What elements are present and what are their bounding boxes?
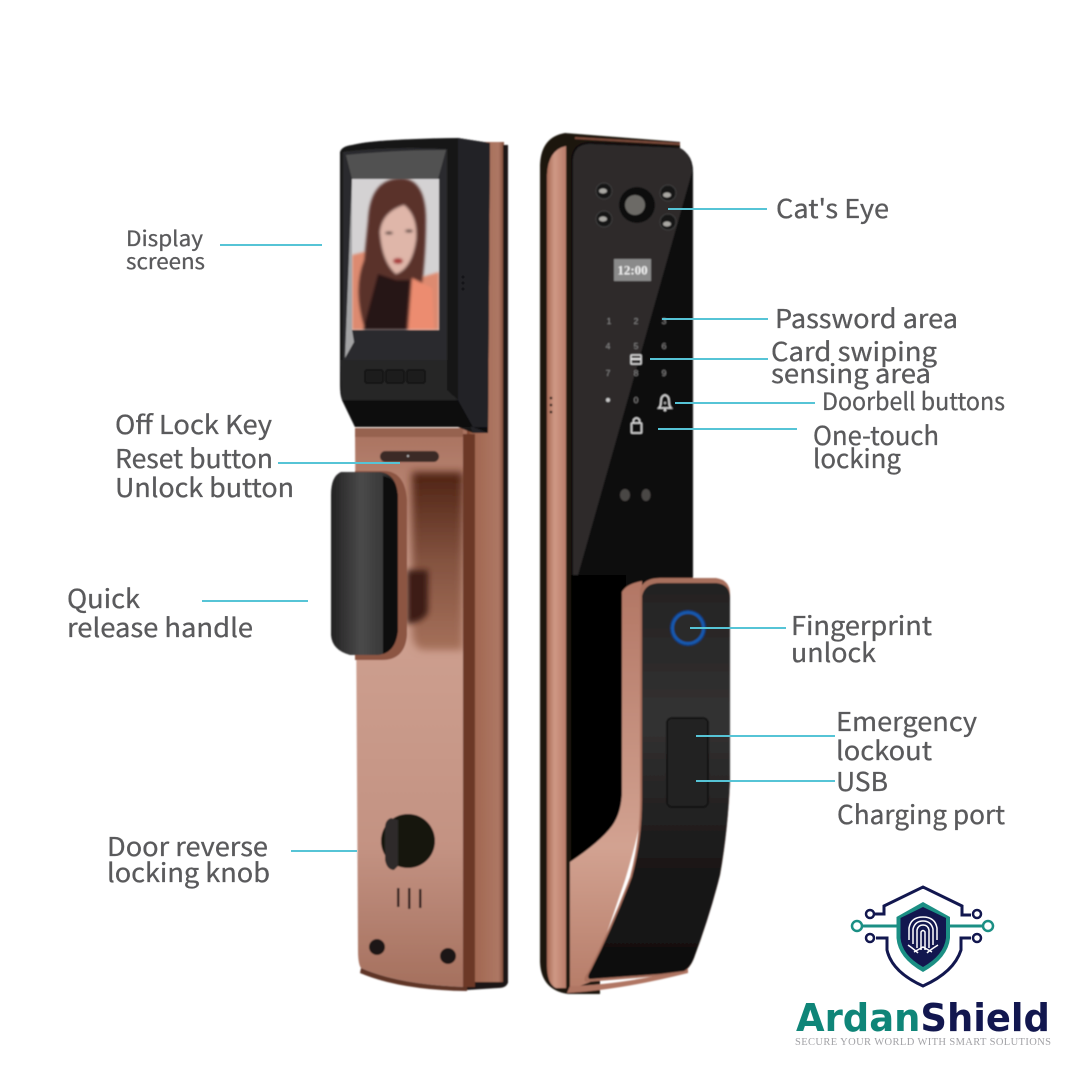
label: card swiping sensing area: sensing area xyxy=(771,354,931,391)
tagline: SECURE YOUR WORLD WITH SMART SOLUTIONS xyxy=(795,1037,1051,1048)
right lock, panel view xyxy=(540,133,730,994)
label: off lock, reset and unlock keys: Unlock button xyxy=(115,468,294,505)
menu buttons xyxy=(365,370,425,383)
label: off lock, reset and unlock keys xyxy=(115,405,294,505)
keypad: 0 xyxy=(634,395,639,405)
camera and IR lights xyxy=(596,183,676,230)
keypad: 7 xyxy=(606,368,611,378)
fingerprint reader xyxy=(670,610,706,646)
side edge xyxy=(467,142,508,990)
label: door reverse locking knob xyxy=(107,827,270,890)
door reverse locking knob xyxy=(381,814,435,909)
label: fingerprint unlock: Fingerprint xyxy=(791,606,932,643)
keypad: 5 xyxy=(634,341,639,351)
logo: ArdanShield xyxy=(795,887,1051,1048)
screw holes xyxy=(369,939,456,964)
clock display xyxy=(614,259,651,281)
label: door reverse locking knob: locking knob xyxy=(107,853,270,890)
label: quick release handle xyxy=(67,579,253,645)
clock display: 12:00 xyxy=(617,262,648,278)
sensor dots xyxy=(620,489,650,501)
label: USB charging port xyxy=(836,762,1005,832)
label: door reverse locking knob: Door reverse xyxy=(107,827,268,864)
label: display screens xyxy=(126,223,205,276)
body plate xyxy=(355,428,467,987)
label: USB charging port: Charging port xyxy=(837,795,1005,832)
frame xyxy=(540,133,680,994)
keypad xyxy=(606,316,667,405)
label: quick release handle: release handle xyxy=(67,608,253,645)
label: emergency lockout: lockout xyxy=(836,731,932,768)
label: off lock, reset and unlock keys: Reset button xyxy=(115,439,273,476)
keypad: 4 xyxy=(606,341,611,351)
label: card swiping sensing area: Card swiping xyxy=(771,332,937,369)
lock icon xyxy=(632,418,642,433)
label: off lock, reset and unlock keys: Off Lock Key xyxy=(115,405,272,442)
label: one-touch locking xyxy=(813,416,939,476)
handle recess shading xyxy=(412,472,463,650)
icon: shield with circuit lines and fingerprint xyxy=(852,887,993,986)
label: card swiping sensing area xyxy=(771,332,937,391)
keypad: 6 xyxy=(662,341,667,351)
keypad: 3 xyxy=(662,316,667,326)
lower copper body xyxy=(570,581,644,990)
label: cat's eye: Cat's Eye xyxy=(776,189,889,226)
emergency / USB cover xyxy=(667,718,708,807)
label: one-touch locking: One-touch xyxy=(813,416,939,453)
keypad: 9 xyxy=(662,368,667,378)
speaker dots xyxy=(550,397,552,413)
quick release handle xyxy=(331,471,407,660)
label: display screens: screens xyxy=(126,246,205,276)
label: emergency lockout xyxy=(836,702,977,768)
label: fingerprint unlock xyxy=(791,606,932,670)
label: doorbell buttons: Doorbell buttons xyxy=(822,382,1005,417)
keypad: 2 xyxy=(634,316,639,326)
label: display screens: Display xyxy=(126,223,203,253)
icon: fingerprint xyxy=(908,917,938,953)
label: emergency lockout: Emergency xyxy=(836,702,977,739)
display head xyxy=(340,138,490,433)
fingerprint handle xyxy=(584,578,730,982)
card sensing icon xyxy=(631,355,641,364)
callout lines xyxy=(202,209,835,851)
display screen with portrait xyxy=(352,178,439,330)
brand name: ArdanShield xyxy=(796,996,1050,1040)
label: password area: Password area xyxy=(775,299,958,336)
left lock, front view xyxy=(331,138,508,991)
label: quick release handle: Quick xyxy=(67,579,141,616)
reset / unlock button slot xyxy=(380,451,439,462)
label: fingerprint unlock: unlock xyxy=(791,633,877,670)
label: one-touch locking: locking xyxy=(813,439,901,476)
handle spindle xyxy=(407,570,428,624)
label: USB charging port: USB xyxy=(836,762,888,799)
front glass panel xyxy=(571,142,693,865)
keypad: 8 xyxy=(634,368,639,378)
keypad: 1 xyxy=(607,316,612,326)
doorbell icon xyxy=(659,395,671,411)
